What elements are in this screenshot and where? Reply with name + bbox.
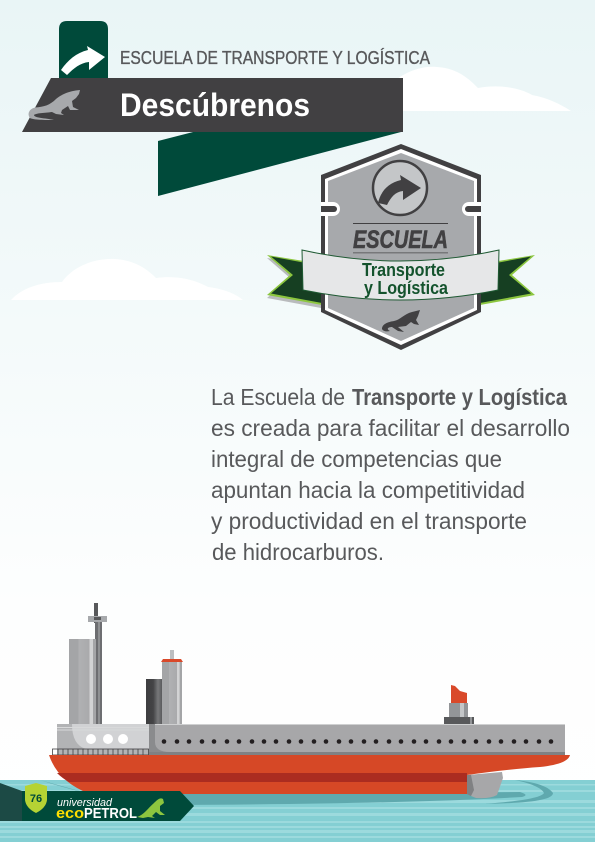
logo text: eco <box>56 805 84 822</box>
badge heading: ESCUELA <box>353 226 448 254</box>
deck <box>149 724 565 755</box>
body text: y productividad en el transporte <box>211 508 527 534</box>
shield notches <box>321 202 340 216</box>
green ribbon shadow <box>158 131 401 196</box>
hull <box>49 755 570 794</box>
header subtitle: ESCUELA DE TRANSPORTE Y LOGÍSTICA <box>120 48 430 68</box>
ribbon text: y Logística <box>364 278 449 298</box>
ribbon text <box>362 260 449 298</box>
tower left <box>69 603 107 725</box>
footer logo <box>0 783 194 822</box>
railing <box>52 749 148 755</box>
icon: green iguana <box>137 798 165 818</box>
title bar <box>22 78 403 132</box>
shield 76 <box>25 783 47 813</box>
ribbon text: Transporte <box>362 260 445 280</box>
logo text: PETROL <box>84 805 137 822</box>
portholes <box>162 739 553 744</box>
body text: es creada para facilitar el desarrollo <box>211 415 570 441</box>
ribbon tails <box>267 255 535 308</box>
icon: iguana <box>29 90 80 120</box>
cloud left <box>11 259 243 300</box>
badge <box>267 144 535 350</box>
water <box>0 780 595 842</box>
icon: white arrow <box>61 46 105 75</box>
shield 76: 76 <box>30 793 42 805</box>
stern equipment <box>444 685 474 725</box>
badge rules <box>353 223 448 224</box>
icon: badge iguana <box>382 310 420 332</box>
header tab with arrow <box>59 21 108 80</box>
icon: circled arrow <box>373 161 427 215</box>
hull stripe <box>57 773 467 782</box>
rudder <box>467 772 503 798</box>
funnel <box>146 650 183 725</box>
body text: La Escuela de <box>211 384 345 410</box>
body text: integral de competencias que <box>211 446 502 472</box>
body text: de hidrocarburos. <box>212 539 384 565</box>
ship <box>49 603 570 798</box>
shield <box>321 144 481 350</box>
logo text: universidad <box>57 797 113 809</box>
title: Descúbrenos <box>120 87 310 123</box>
body text: apuntan hacia la competitividad <box>211 477 525 503</box>
body text: Transporte y Logística <box>352 384 567 410</box>
cloud top right <box>325 67 571 111</box>
hull shadow and wake <box>40 780 526 805</box>
logo text <box>56 797 137 822</box>
ribbon band <box>302 250 499 300</box>
bridge <box>57 724 150 755</box>
body text <box>211 384 570 565</box>
